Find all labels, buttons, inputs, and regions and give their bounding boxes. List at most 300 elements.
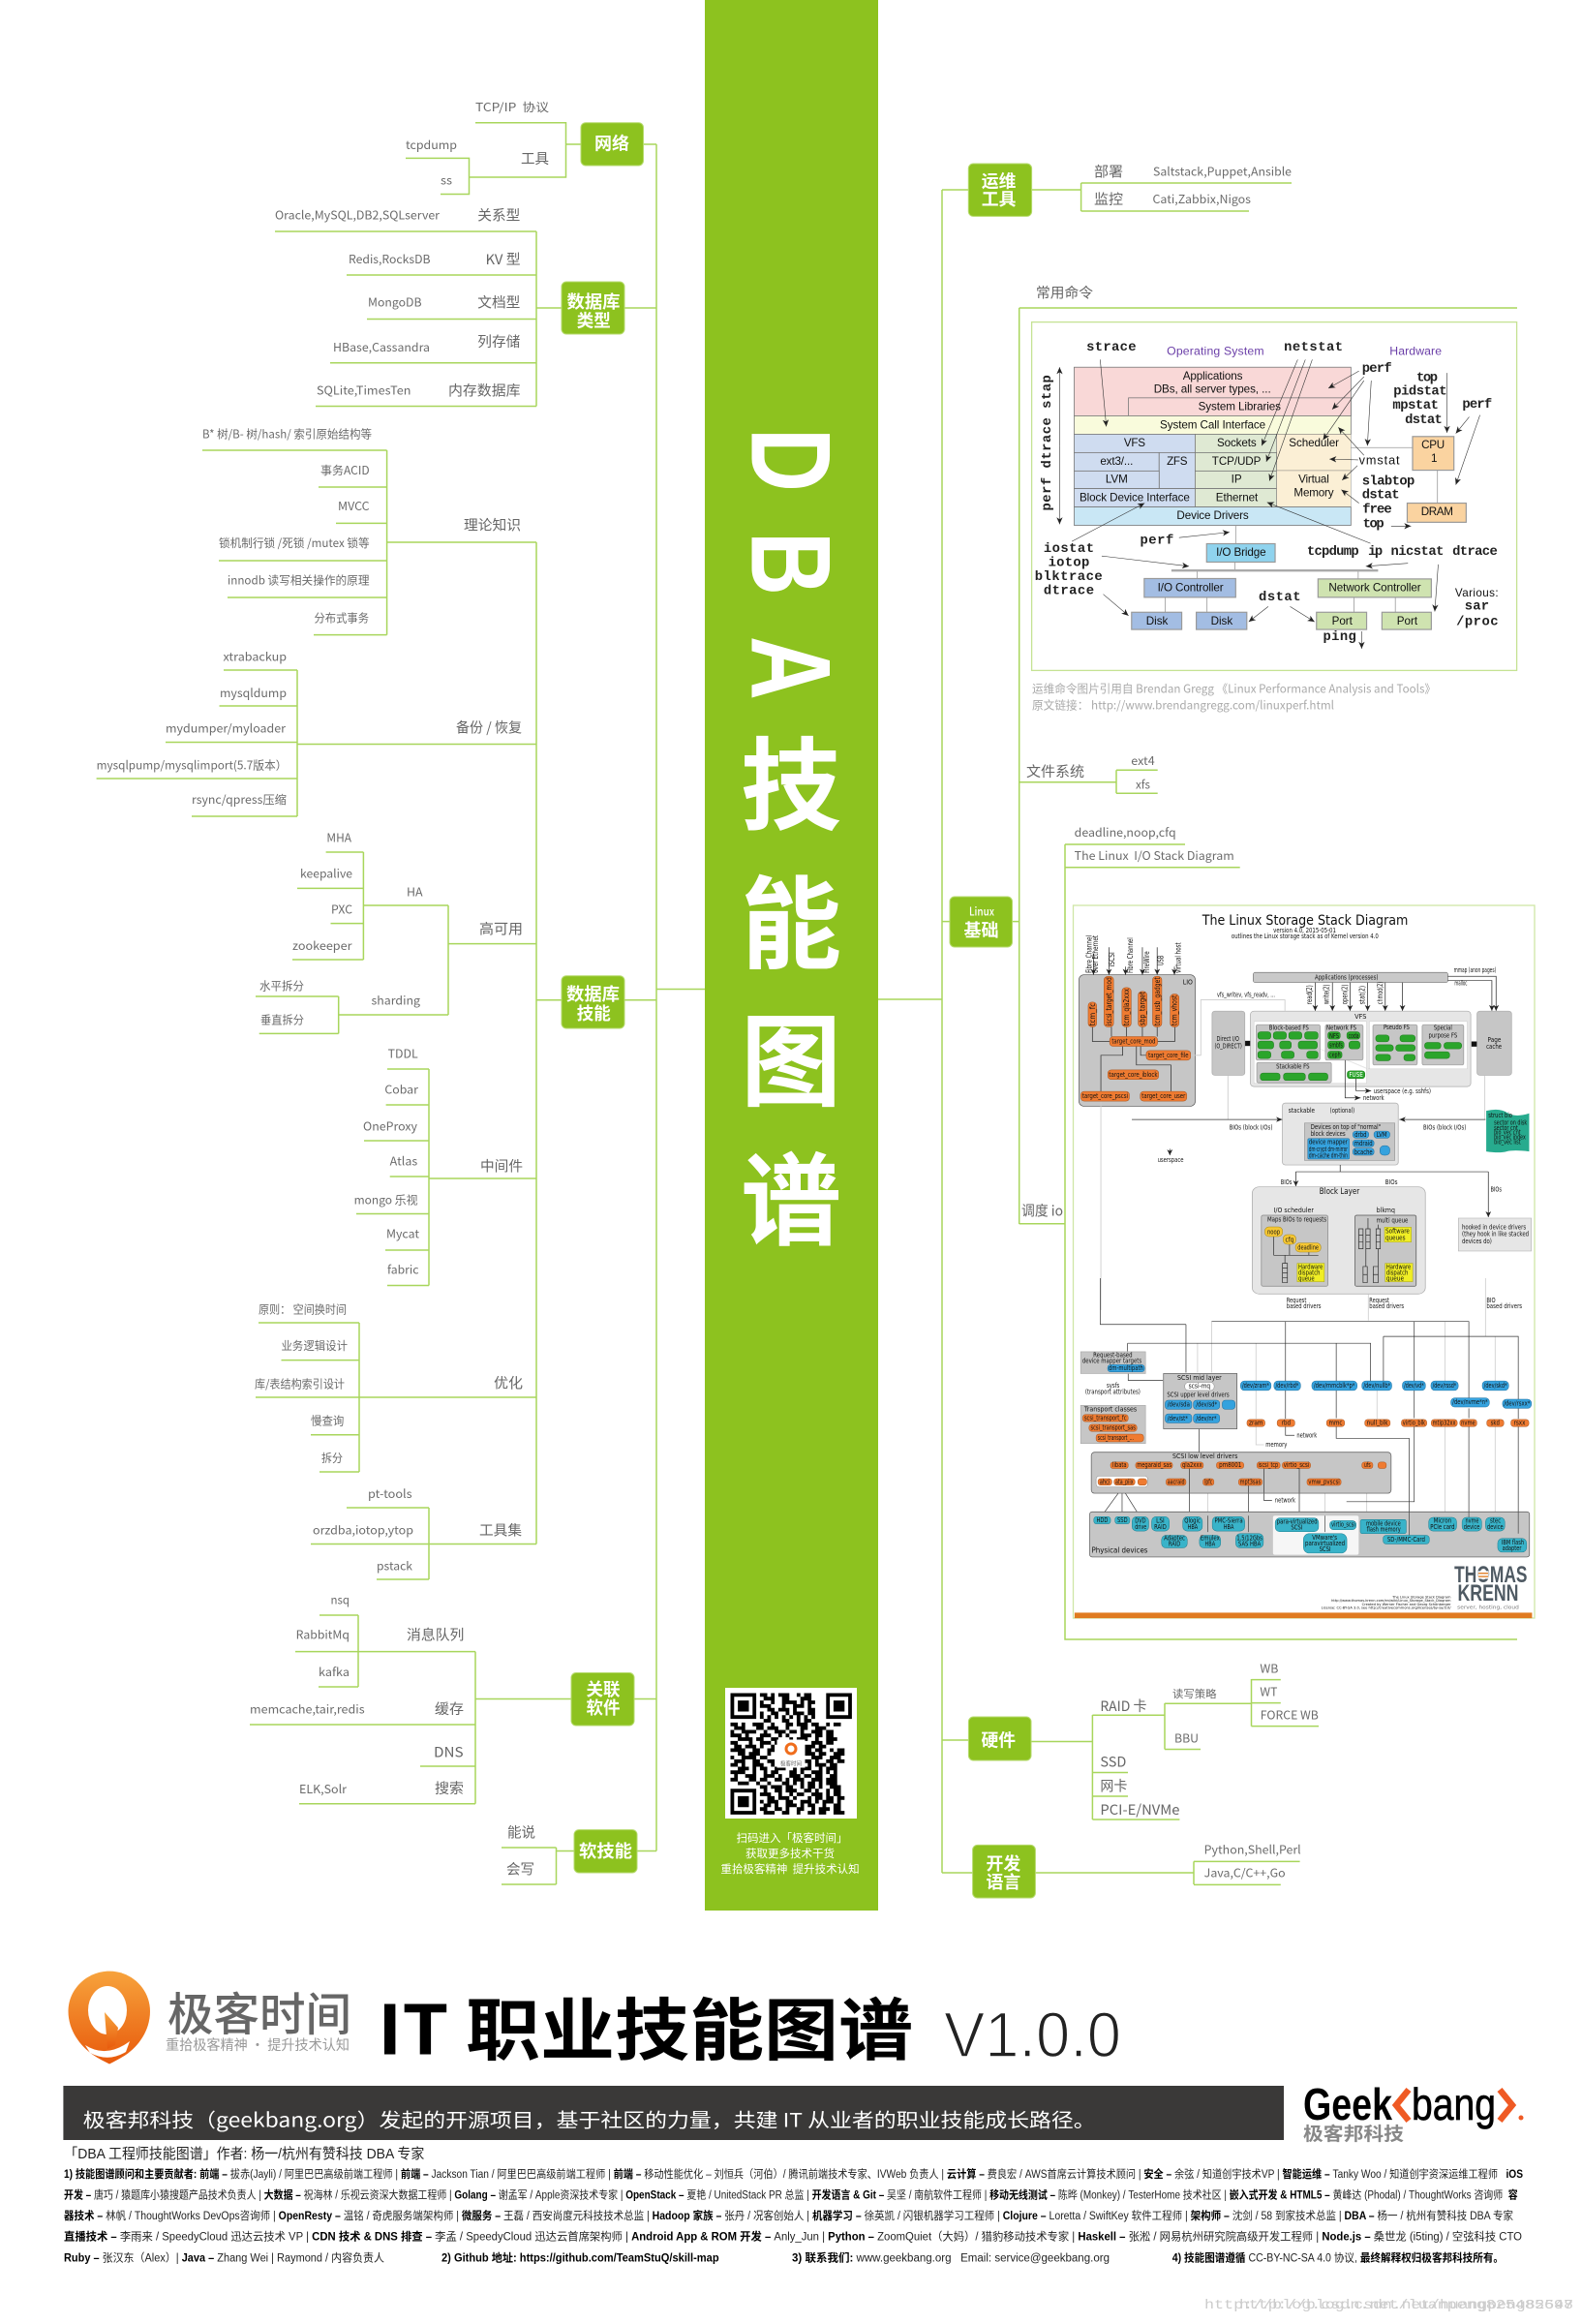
- tool labels: ip: [1368, 544, 1383, 560]
- VFS block: vfs_writev, vfs_readv, ...: [1217, 991, 1275, 999]
- logo icon: [68, 1972, 150, 2064]
- sub-branch: 高可用: [256, 829, 536, 1033]
- sub-branch: 中间件: OneProxy: [363, 1117, 418, 1135]
- leaves: 开发语言: Python,Shell,Perl: [1204, 1842, 1301, 1857]
- VFS block: stat(2): [1357, 986, 1367, 1004]
- sub-branch: 理论知识: MVCC: [338, 498, 370, 514]
- physical devices: SD-/MMC-Card: [1387, 1536, 1425, 1544]
- physical devices: paravirtualized: [1305, 1540, 1345, 1547]
- branch: 开发语言: [942, 1842, 1301, 1898]
- VFS block: network: [1363, 1093, 1384, 1102]
- leaves: 运维工具: 监控: [1094, 189, 1123, 209]
- request-based and SCSI mid layer: /dev/sd*: [1196, 1401, 1217, 1409]
- sub-branch: 理论知识: 理论知识: [464, 515, 521, 535]
- physical devices: SAS HBA: [1238, 1540, 1261, 1548]
- dark slogan banner: 极客邦科技（geekbang.org）发起的开源项目，基于社区的力量，共建 IT 从业者的职业技能成长路径。: [83, 2105, 1096, 2132]
- node: 关联软件: 软件: [587, 1695, 620, 1720]
- SCSI low level drivers: aacraid: [1168, 1479, 1185, 1486]
- logo: 极客时间: 重拾极客精神 · 提升技术认知: [166, 2034, 350, 2055]
- sub-branch: 理论知识: innodb 读写相关操作的原理: [228, 571, 370, 589]
- leaves: 网络: ss: [441, 172, 452, 188]
- LIO block: USB: [1156, 956, 1166, 965]
- request-based and SCSI mid layer: scsi_transport_sas: [1090, 1424, 1136, 1432]
- layer labels: Network Controller: [1328, 581, 1421, 594]
- contributor lines: 2) Github 地址: https://github.com/TeamStuQ/skill-map: [441, 2250, 719, 2264]
- sub-branch: 工具集: pt-tools: [368, 1485, 412, 1502]
- leaves: 数据库类型: [275, 205, 521, 401]
- physical devices: LSI: [1156, 1517, 1165, 1525]
- layer labels: System Call Interface: [1160, 418, 1265, 431]
- layer labels: Applications: [1183, 370, 1243, 382]
- physical devices: Qlogic: [1184, 1517, 1201, 1525]
- Thomas Krenn logo and credits: Created by Werner Fischer and Georg Schönberger: [1362, 1603, 1451, 1606]
- title: DBA 技能图谱: [727, 428, 853, 1267]
- block layer: noop: [1267, 1228, 1280, 1236]
- layer labels: Device Drivers: [1176, 509, 1249, 522]
- physical devices: HBA: [1205, 1540, 1215, 1548]
- request-based and SCSI mid layer: scsi_transport_...: [1098, 1434, 1134, 1442]
- QR caption: 获取更多技术干货: [745, 1846, 835, 1861]
- SCSI low level drivers: pm8001: [1219, 1461, 1241, 1469]
- leaves: 关联软件: RabbitMq: [296, 1627, 350, 1642]
- VFS block: Network FS: [1326, 1024, 1356, 1031]
- branch: Linux 基础: [942, 283, 1535, 1639]
- VFS block: open(2): [1340, 984, 1350, 1004]
- hardware blocks: [1132, 437, 1466, 629]
- right trunk connector lines: [878, 190, 942, 1873]
- leaves: 调度 io: 调度 io: [1021, 1201, 1063, 1220]
- sub-branch: 备份/恢复: rsync/qpress压缩: [192, 791, 287, 808]
- stackable devices: dm-crypt dm-mirror: [1309, 1145, 1348, 1153]
- request-based and SCSI mid layer: SCSI upper level drivers: [1167, 1391, 1230, 1398]
- sub-branch: 中间件: Atlas: [390, 1152, 418, 1170]
- block layer: multi queue: [1377, 1216, 1409, 1224]
- branch: 软技能: [502, 1822, 656, 1884]
- title: DBA 技能图谱: 图: [741, 980, 841, 1127]
- block driver pills: rbd: [1282, 1419, 1291, 1427]
- physical devices: Micron: [1434, 1517, 1451, 1525]
- tool labels: perf: [1140, 534, 1173, 549]
- Thomas Krenn logo and credits: http://www.thomas-krenn.com/en/wiki/Linux_Storage_Stack_Diagram: [1331, 1599, 1451, 1603]
- VFS block: (O_DIRECT): [1214, 1042, 1242, 1050]
- tool labels: dtrace: [1044, 584, 1094, 599]
- VFS block: coda: [1349, 1031, 1359, 1040]
- physical devices: nvme: [1465, 1517, 1478, 1525]
- layer labels: CPU: [1421, 439, 1445, 451]
- figure caption: [1032, 680, 1436, 713]
- block layer: Hardware: [1298, 1263, 1323, 1271]
- physical devices: para-virtualized: [1277, 1517, 1318, 1525]
- stackable devices: sector on disk: [1494, 1118, 1528, 1126]
- tool labels: free: [1362, 502, 1392, 517]
- tool labels: dstat: [1362, 488, 1400, 504]
- physical devices: PCIe card: [1430, 1523, 1455, 1531]
- block layer: blkmq: [1377, 1206, 1395, 1214]
- leaves: 软技能: 会写: [506, 1859, 534, 1879]
- storage diagram: lower half: [1075, 1278, 1532, 1618]
- LIO block: sbp_target: [1138, 992, 1147, 1025]
- logo: Geekbang: Geek: [1303, 2079, 1392, 2129]
- physical devices: Adaptec: [1164, 1534, 1185, 1542]
- sub-branch: 备份/恢复: 备份 / 恢复: [456, 717, 522, 738]
- SCSI low level drivers: lpfc: [1204, 1479, 1212, 1486]
- sub-branch: 中间件: [354, 1046, 536, 1286]
- LIO block: target_core_user: [1141, 1091, 1185, 1100]
- sub-branch: 工具集: orzdba,iotop,ytop: [313, 1522, 413, 1538]
- layer labels: Operating System: [1167, 345, 1264, 358]
- layer labels: IP: [1232, 474, 1242, 486]
- physical devices: stec: [1490, 1517, 1501, 1525]
- sub-branch: 理论知识: 分布式事务: [314, 610, 369, 626]
- title: DBA 技能图谱: B: [727, 532, 853, 596]
- leaves: 数据库类型: 关系型: [477, 205, 520, 225]
- leaves: 关联软件: [250, 1592, 464, 1798]
- layer labels: Various:: [1455, 587, 1499, 599]
- physical devices: device: [1487, 1523, 1504, 1531]
- stackable devices: bio_vec list: [1494, 1138, 1521, 1146]
- node: Linux 基础: Linux: [969, 902, 995, 920]
- node: 软技能: [574, 1830, 637, 1873]
- storage diagram: lower half: Request: [1287, 1297, 1306, 1304]
- tool labels: perf: [1462, 397, 1492, 413]
- figure caption: 原文链接： http://www.brendangregg.com/linuxperf.html: [1032, 697, 1334, 713]
- title: DBA 技能图谱: A: [727, 636, 853, 700]
- LIO block: virtual host: [1173, 942, 1183, 973]
- stackable devices: stackable: [1289, 1106, 1315, 1115]
- block driver pills: /dev/mmcblk*p*: [1314, 1382, 1355, 1390]
- LIO block: target_core_mod: [1111, 1037, 1155, 1045]
- physical devices: HBA: [1188, 1523, 1198, 1531]
- stackable devices: bio_vec cnt: [1494, 1128, 1521, 1136]
- sub-branch: 高可用: zookeeper: [292, 937, 352, 954]
- physical devices: adapter: [1503, 1544, 1522, 1552]
- node: 运维工具: [968, 164, 1032, 216]
- node: 数据库技能: 技能: [577, 1000, 611, 1025]
- physical devices: flash memory: [1367, 1525, 1401, 1533]
- leaves: 数据库类型: KV 型: [486, 249, 521, 269]
- stackable devices: struct bio: [1488, 1111, 1512, 1119]
- VFS block: purpose FS: [1428, 1031, 1458, 1039]
- tool labels: iostat: [1044, 541, 1094, 557]
- storage diagram: upper half: The Linux Storage Stack Diagram: [1202, 913, 1408, 929]
- block driver pills: mmc: [1329, 1419, 1343, 1427]
- node: 数据库技能: 数据库: [566, 981, 620, 1006]
- branch: 数据库类型: [275, 205, 656, 407]
- sub-branch: 高可用: PXC: [331, 901, 352, 918]
- leaves: 数据库类型: SQLite,TimesTen: [317, 382, 411, 399]
- layer labels: I/O Bridge: [1216, 546, 1266, 559]
- leaves: 硬件: WB: [1260, 1660, 1279, 1677]
- sub-branch: 优化: 原则： 空间换时间: [259, 1301, 347, 1317]
- physical devices: [1089, 1512, 1530, 1557]
- sub-branch: 中间件: 中间件: [480, 1156, 523, 1176]
- layer labels: [1080, 345, 1499, 627]
- VFS block: Stackable FS: [1276, 1062, 1310, 1070]
- block layer: hooked in device drivers: [1462, 1223, 1526, 1231]
- block driver pills: /dev/nvme*n*: [1452, 1398, 1488, 1406]
- node: 开发语言: [973, 1845, 1035, 1898]
- storage diagram: upper half: outlines the Linux storage stack as of Kernel version 4.0: [1232, 932, 1379, 940]
- QR code: [725, 1688, 857, 1819]
- storage diagram: lower half: based drivers: [1287, 1302, 1322, 1310]
- leaves: 运维工具: [1094, 161, 1292, 209]
- block layer: BIOs: [1385, 1177, 1398, 1186]
- VFS block: chmod(2): [1376, 982, 1384, 1004]
- VFS block: FUSE: [1349, 1071, 1363, 1079]
- sub-branch: 高可用: 垂直拆分: [260, 1011, 304, 1028]
- block layer: dispatch: [1386, 1269, 1409, 1277]
- sub-branch: 中间件: mongo 乐视: [354, 1191, 418, 1208]
- block driver pills: rsxx: [1514, 1419, 1525, 1427]
- LIO block: iscsi_target_mod: [1105, 977, 1113, 1025]
- LIO block: tcm_qla2xxx: [1122, 988, 1131, 1025]
- sub-branch: 工具集: 工具集: [479, 1520, 523, 1540]
- tool labels: perf: [1362, 361, 1392, 377]
- physical devices: device: [1464, 1523, 1479, 1531]
- block driver pills: /dev/zram*: [1242, 1382, 1269, 1390]
- sub-branch: 高可用: 高可用: [479, 918, 523, 939]
- sub-branch: 优化: [255, 1301, 536, 1472]
- LIO block: target_core_iblock: [1109, 1070, 1158, 1079]
- node: 开发语言: 开发: [986, 1850, 1020, 1876]
- sub-branch: 备份/恢复: [97, 649, 536, 816]
- layer labels: DBs, all server types, ...: [1154, 383, 1271, 396]
- node: Linux 基础: [950, 897, 1013, 947]
- layer labels: Port: [1397, 615, 1418, 627]
- block driver pills: network: [1296, 1432, 1318, 1440]
- VFS block: mmap (anon pages): [1454, 965, 1496, 974]
- LIO block: [1080, 935, 1285, 1310]
- stackable devices: LVM: [1377, 1130, 1387, 1139]
- LIO block: iSCSI: [1108, 952, 1116, 966]
- block driver pills: memory: [1265, 1441, 1287, 1449]
- block layer: Maps BIOs to requests: [1267, 1215, 1326, 1223]
- storage diagram: upper half: [1080, 913, 1532, 1310]
- layer labels: Block Device Interface: [1080, 492, 1190, 505]
- request-based and SCSI mid layer: (transport attributes): [1085, 1388, 1141, 1395]
- block layer: cfq: [1286, 1236, 1293, 1243]
- leaves: 关联软件: nsq: [331, 1592, 350, 1607]
- tool arrows: [1059, 359, 1480, 649]
- request-based and SCSI mid layer: scsi_transport_fc: [1084, 1414, 1127, 1422]
- contributor lines: [64, 2167, 1523, 2264]
- storage diagram: lower half: Request: [1369, 1297, 1389, 1304]
- VFS block: read(2): [1305, 985, 1314, 1004]
- node: 关联软件: [571, 1673, 634, 1726]
- QR caption: [720, 1830, 860, 1877]
- request-based and SCSI mid layer: [1080, 1352, 1237, 1444]
- VFS block: cache: [1486, 1042, 1502, 1051]
- leaves: 关联软件: 缓存: [435, 1698, 464, 1719]
- VFS block: malloc: [1454, 979, 1467, 987]
- leaves: 硬件: [1100, 1660, 1319, 1819]
- block driver pills: zram: [1249, 1419, 1263, 1427]
- sub-branch: 理论知识: [202, 426, 536, 635]
- VFS block: ceph: [1329, 1051, 1341, 1058]
- stackable devices: bcache: [1354, 1147, 1373, 1156]
- block layer: deadline: [1297, 1243, 1319, 1252]
- layer labels: Hardware: [1389, 345, 1442, 358]
- physical devices: SCSI: [1320, 1545, 1331, 1553]
- sub-branch: 中间件: TDDL: [388, 1046, 418, 1061]
- contributor lines: 器技术 – 林帆 / ThoughtWorks DevOps咨询师 | OpenResty – 温铭 / 奇虎服务端架构师 | 微服务 – 王磊 / 西安尚度元科技技术总监 | Hadoop 家族 – 张丹 / 况客创始人 | 机器学习 – 徐英凯 / 闪银机器学习工程师 | Clojure – Loretta / SwiftKey 软件工程师 | 架构师 – 沈剑 / 58 到家技术总监 | DBA – 杨一 / 杭州有赞科技 DBA 专家: [64, 2209, 1513, 2222]
- node: 数据库类型: 数据库: [567, 289, 620, 314]
- layer labels: Disk: [1146, 615, 1169, 627]
- leaves: 硬件: 读写策略: [1172, 1686, 1216, 1701]
- SCSI low level drivers: qla2xxx: [1182, 1461, 1202, 1469]
- branch: 关联软件: [250, 1592, 656, 1804]
- VFS block: write(2): [1322, 984, 1331, 1004]
- tool labels: dtrace: [1452, 544, 1498, 560]
- stackable devices: drbd: [1354, 1130, 1366, 1139]
- branch: 运维工具: [942, 161, 1292, 216]
- request-based and SCSI mid layer: /dev/sda: [1168, 1401, 1190, 1409]
- sub-branch: 高可用: 水平拆分: [259, 978, 304, 994]
- layer labels: 1: [1431, 452, 1437, 465]
- block layer: queue: [1298, 1274, 1315, 1282]
- stackable devices: sector cnt: [1494, 1123, 1518, 1132]
- version label: V1.0.0: [944, 1999, 1121, 2070]
- layer labels: TCP/UDP: [1212, 455, 1262, 468]
- tool labels: slabtop: [1362, 474, 1415, 489]
- request-based and SCSI mid layer: sysfs: [1107, 1382, 1120, 1390]
- contributor lines: 直播技术 – 李雨来 / SpeedyCloud 迅达云技术 VP | CDN 技术 & DNS 排查 – 李孟 / SpeedyCloud 迅达云首席架构师 | Android App & ROM 开发 – Anly_Jun | Python – ZoomQuiet（大妈）/ 猎豹移动技术专家 | Haskell – 张淞 / 网易杭州研究院高级开发工程师 | Node.js – 桑世龙 (i5ting) / 空弦科技 CTO: [64, 2230, 1522, 2244]
- leaves: 调度 io: The Linux I/O Stack Diagram: [1075, 847, 1234, 864]
- dark slogan banner: [63, 2086, 1284, 2140]
- figure: Linux performance tools diagram: [1032, 322, 1517, 670]
- leaves: 关联软件: ELK,Solr: [299, 1781, 347, 1797]
- block layer: dispatch: [1298, 1269, 1321, 1277]
- leaves: 硬件: WT: [1260, 1683, 1277, 1700]
- Thomas Krenn logo and credits: [1075, 1562, 1532, 1618]
- logo: 极客时间: 极客时间: [167, 1977, 351, 2044]
- layer labels: Sockets: [1217, 437, 1257, 449]
- sub-branch: 优化: 慢查询: [311, 1412, 344, 1429]
- leaves: 软技能: 能说: [507, 1822, 535, 1842]
- credits block: [64, 2146, 1523, 2264]
- physical devices: HDD: [1096, 1516, 1108, 1524]
- tool labels: pidstat: [1393, 384, 1447, 400]
- leaves: 关联软件: 消息队列: [407, 1625, 464, 1644]
- Thomas Krenn logo and credits: The Linux Storage Stack Diagram: [1391, 1595, 1451, 1599]
- leaves: 数据库类型: 内存数据库: [448, 380, 521, 401]
- credits heading: 「DBA 工程师技能图谱」作者: 杨一/杭州有赞科技 DBA 专家: [64, 2146, 424, 2162]
- node: Linux 基础: 基础: [964, 917, 999, 942]
- physical devices: SSD: [1117, 1516, 1128, 1524]
- node: 软技能: 软技能: [579, 1838, 632, 1863]
- tool labels: mpstat: [1392, 398, 1439, 413]
- SCSI low level drivers: libata: [1112, 1461, 1127, 1469]
- node: 运维工具: 运维: [982, 168, 1016, 194]
- block layer: I/O scheduler: [1274, 1206, 1314, 1214]
- block layer: Block Layer: [1320, 1187, 1359, 1197]
- tool labels: /proc: [1456, 615, 1499, 630]
- SCSI low level drivers: ata_piix: [1115, 1478, 1134, 1485]
- block layer: (they hook in like stacked: [1462, 1230, 1529, 1238]
- LIO block: FireWire: [1142, 951, 1151, 973]
- node: 硬件: 硬件: [982, 1728, 1016, 1753]
- SCSI low level drivers: mpt3sas: [1240, 1479, 1261, 1486]
- LIO block: tcm_fc: [1088, 1003, 1097, 1025]
- leaves: 关联软件: 搜索: [435, 1778, 464, 1798]
- physical devices: mobile device: [1366, 1519, 1401, 1527]
- tool labels: nicstat: [1390, 544, 1444, 560]
- physical devices: RAID: [1154, 1523, 1167, 1531]
- watermark: http://blog.csdn.net/huangpeng82548: [1239, 2298, 1573, 2313]
- node: 数据库类型: [562, 282, 624, 334]
- layer labels: ZFS: [1167, 455, 1188, 468]
- left trunk connector lines: [656, 144, 705, 1851]
- request-based and SCSI mid layer: scsi-mq: [1189, 1383, 1210, 1391]
- SCSI low level drivers: network: [1275, 1496, 1296, 1505]
- central green title bar: [705, 0, 878, 1911]
- block driver pills: /dev/nullb*: [1363, 1382, 1391, 1390]
- Thomas Krenn logo and credits: KRENN: [1457, 1580, 1518, 1606]
- block driver pills: /dev/rbd*: [1275, 1382, 1299, 1390]
- LIO block: tcm_usb_gadget: [1153, 977, 1162, 1025]
- block layer: queues: [1385, 1234, 1406, 1242]
- leaves: 网络: tcpdump: [406, 137, 457, 153]
- storage diagram: lower half: BIO: [1486, 1297, 1496, 1304]
- Thomas Krenn logo and credits: THOMAS: [1454, 1562, 1527, 1588]
- layer labels: LVM: [1106, 474, 1128, 486]
- tool labels: dstat: [1405, 413, 1443, 428]
- node: 网络: [581, 123, 643, 166]
- VFS block: VFS: [1354, 1013, 1367, 1021]
- SCSI low level drivers: megaraid_sas: [1137, 1461, 1171, 1469]
- SCSI low level drivers: [1091, 1452, 1391, 1505]
- block driver pills: /dev/vd*: [1404, 1382, 1424, 1390]
- block layer: Hardware: [1386, 1263, 1412, 1271]
- title: DBA 技能图谱: 能: [741, 842, 841, 990]
- block driver pills: skd: [1491, 1419, 1500, 1427]
- block layer: BIOs: [1490, 1185, 1502, 1193]
- leaves: 运维工具: Cati,Zabbix,Nigos: [1152, 191, 1251, 207]
- block driver pills: mtip32xx: [1433, 1419, 1456, 1427]
- leaves: 文件系统: [1026, 752, 1155, 792]
- SCSI low level drivers: iscsi_tcp: [1259, 1461, 1279, 1469]
- sub-branch: 中间件: fabric: [387, 1261, 418, 1278]
- storage diagram: lower half: based drivers: [1486, 1302, 1522, 1310]
- leaves: 开发语言: Java,C/C++,Go: [1204, 1865, 1286, 1881]
- heading: 常用命令: 常用命令: [1036, 283, 1094, 302]
- LIO block: target_core_pscsi: [1082, 1091, 1128, 1100]
- leaves: 硬件: SSD: [1100, 1751, 1126, 1772]
- stackable devices: bio_vec index: [1494, 1133, 1526, 1141]
- layer labels: Disk: [1211, 615, 1232, 627]
- VFS block: smbfs: [1329, 1041, 1343, 1049]
- physical devices: VMware's: [1312, 1534, 1337, 1542]
- physical devices: Emulex: [1201, 1534, 1220, 1542]
- stackable devices: userspace: [1158, 1155, 1184, 1164]
- layer labels: Ethernet: [1216, 492, 1259, 505]
- request-based and SCSI mid layer: Transport classes: [1083, 1406, 1138, 1414]
- VFS block: [1212, 965, 1511, 1102]
- block layer: Software: [1385, 1227, 1410, 1236]
- leaves: 软技能: [506, 1822, 535, 1879]
- stackable devices: Devices on top of "normal": [1311, 1122, 1381, 1131]
- block layer: [1252, 1165, 1532, 1294]
- LIO block: LIO: [1183, 978, 1193, 987]
- logo: 极客时间: [68, 1972, 351, 2064]
- VFS block: NFS: [1329, 1031, 1339, 1040]
- contributor lines: 4) 技能图谱遵循 CC-BY-NC-SA 4.0 协议, 最终解释权归极客邦科技所有。: [1172, 2250, 1504, 2264]
- leaves: 数据库类型: 文档型: [477, 292, 520, 312]
- request-based and SCSI mid layer: SCSI mid layer: [1177, 1374, 1222, 1382]
- sub-branch: 优化: 优化: [494, 1373, 523, 1392]
- logo: Geekbang: 极客邦科技: [1303, 2120, 1404, 2146]
- tool labels: strace: [1086, 340, 1137, 355]
